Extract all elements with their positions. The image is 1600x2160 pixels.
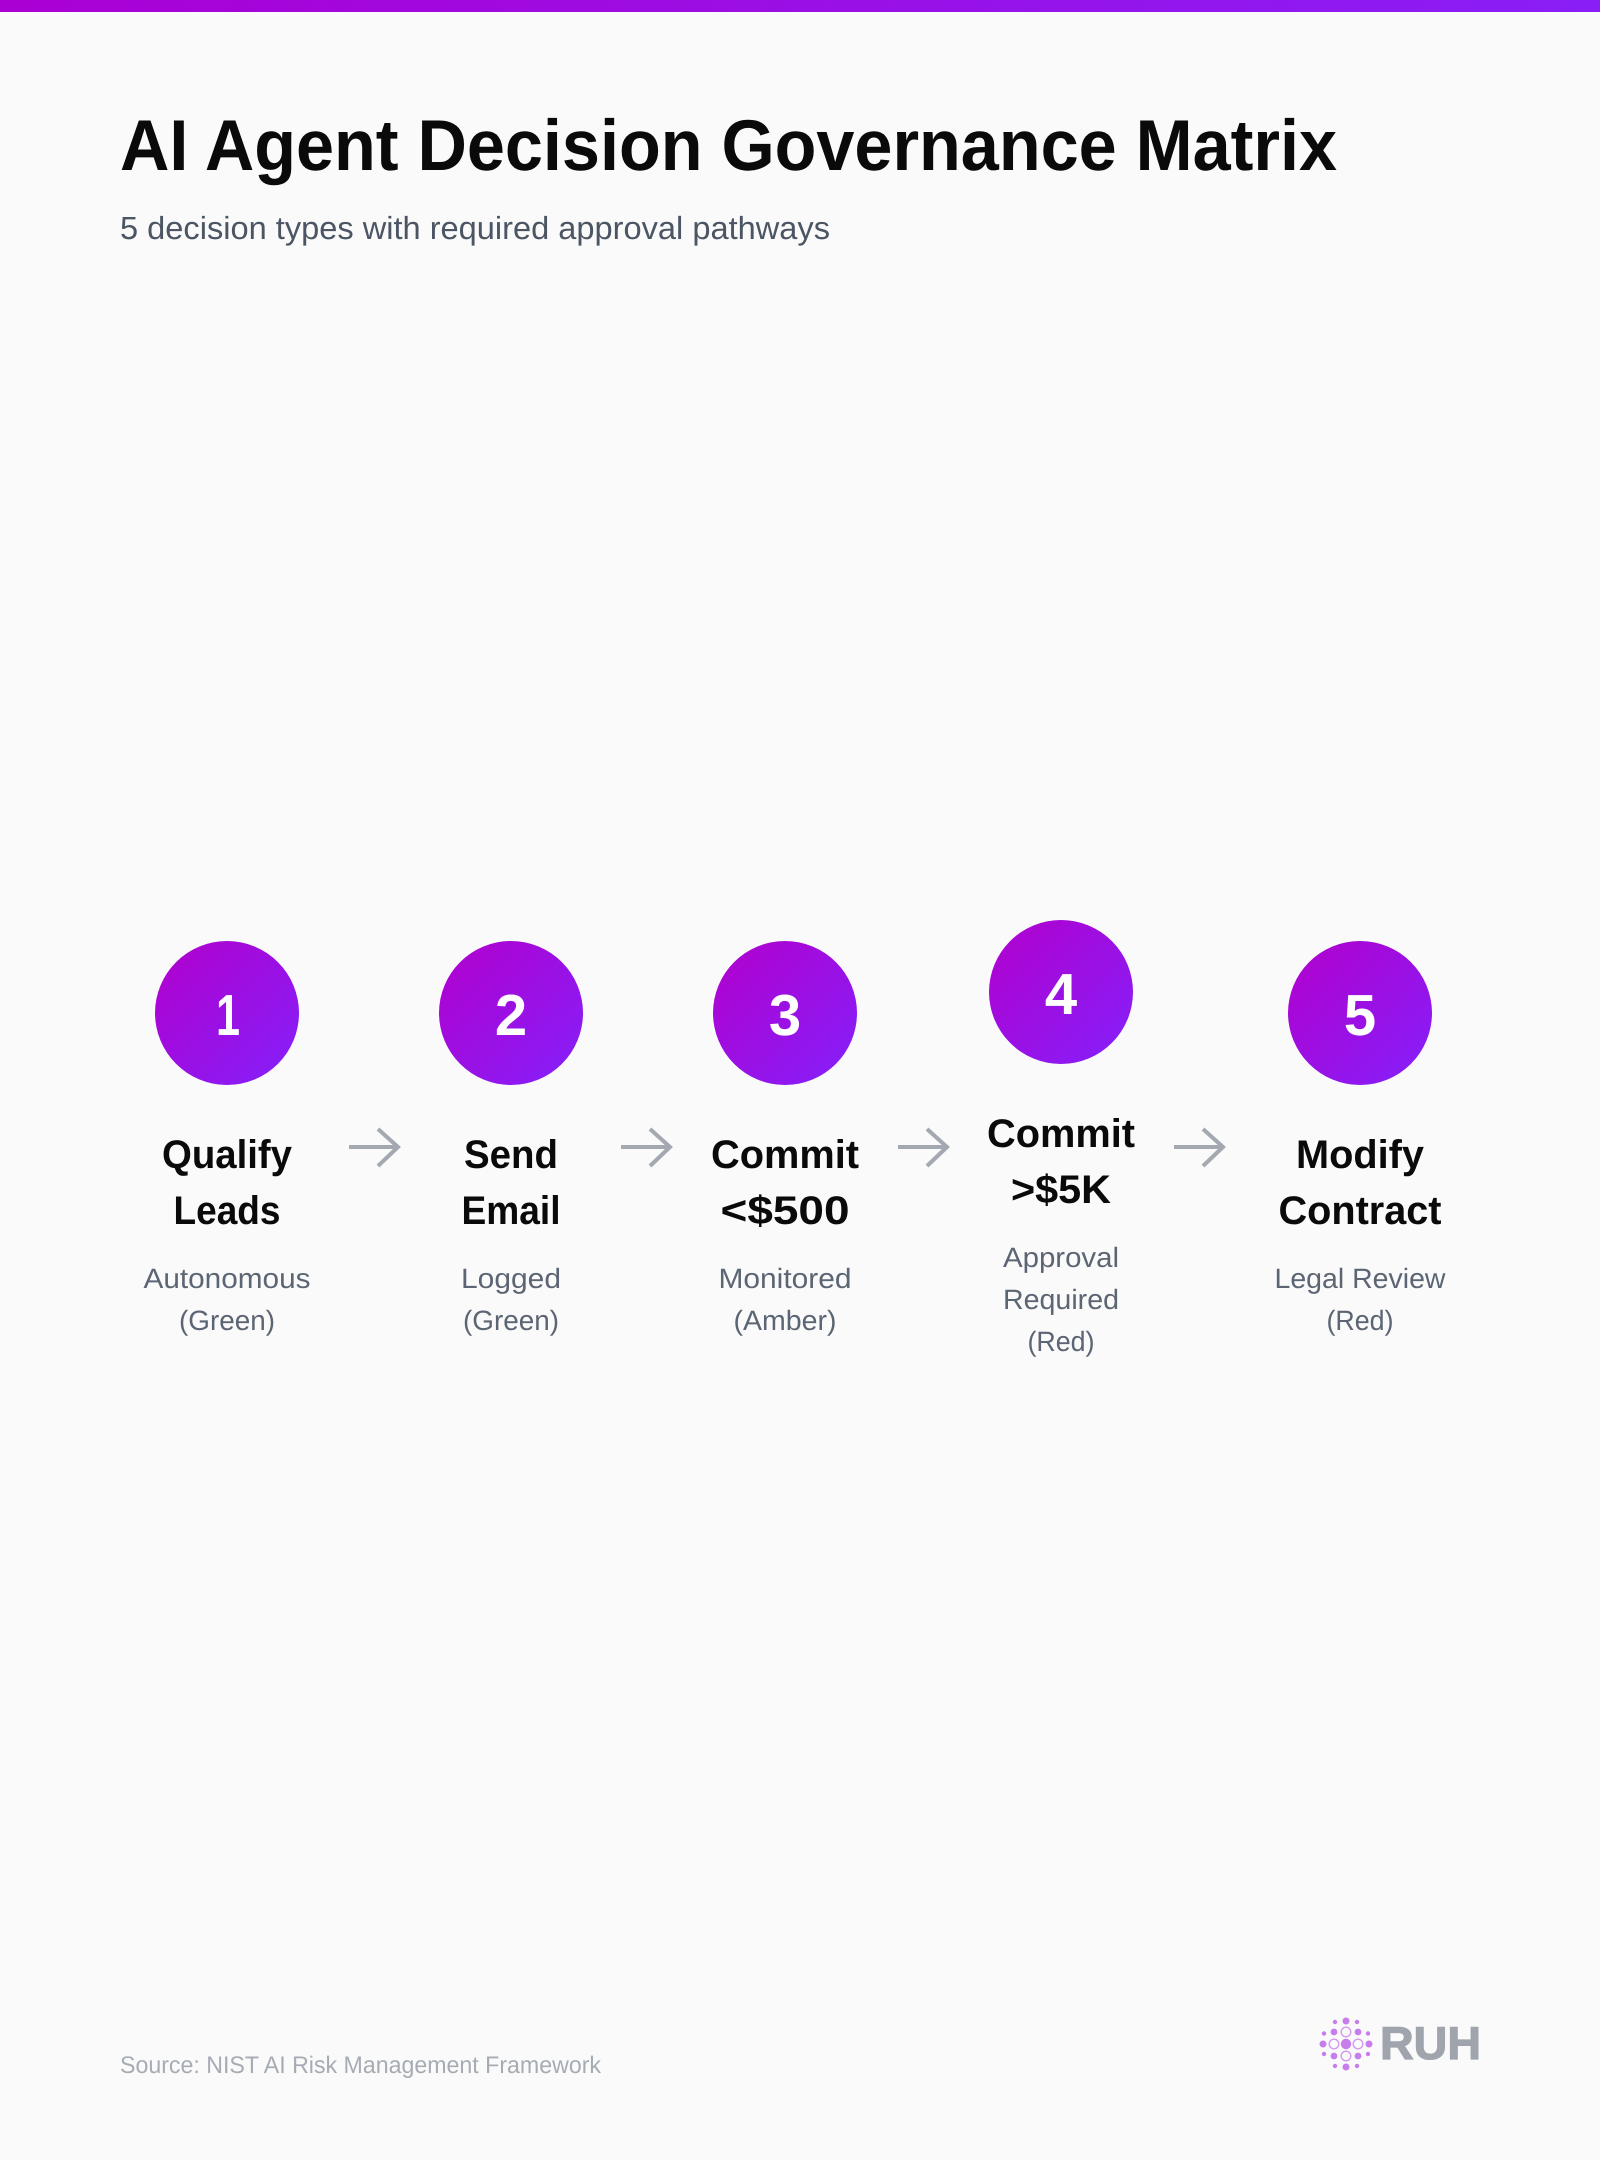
step 2 heading: Email [462,1189,560,1233]
step 1: qualify leads [144,941,310,1336]
title: AI Agent Decision Governance Matrix [120,106,1337,186]
step 4 description [1003,1242,1119,1357]
number badge 4 [989,920,1133,1064]
step 3 heading: Commit [711,1133,859,1177]
arrow 1 to 2 [349,1129,398,1166]
step 2: send email [439,941,583,1336]
step 5 description: Legal Review [1274,1263,1446,1294]
step 1 description [144,1263,310,1336]
step 3 description: Monitored [718,1263,852,1294]
step 5 heading: Contract [1278,1189,1442,1233]
step 4 description: (Red) [1028,1326,1094,1357]
step 1 heading: Qualify [162,1133,293,1177]
number badge 2 [439,941,583,1085]
step 1 heading [162,1133,293,1233]
number badge 5 [1288,941,1432,1085]
arrow 4 to 5 [1174,1129,1223,1166]
logo icon: dot cluster [1320,2018,1372,2070]
logo wordmark: RUH [1380,2017,1481,2069]
number badge 1: 1 [216,983,240,1048]
number badge 3 [713,941,857,1085]
step 4 heading: >$5K [1011,1168,1111,1212]
step 4 heading: Commit [987,1112,1135,1156]
step 4: commit over 5K [987,920,1135,1357]
step 5 heading: Modify [1296,1133,1425,1177]
step 4 description: Required [1003,1284,1119,1315]
arrow 3 to 4 [898,1129,947,1166]
step 3 heading: <$500 [720,1189,850,1233]
subtitle: 5 decision types with required approval pathways [120,210,830,246]
number badge 1 [155,941,299,1085]
step 4 heading [987,1112,1135,1212]
source note: Source: NIST AI Risk Management Framework [120,2052,602,2079]
step 5: modify contract [1274,941,1446,1336]
arrow 2 to 3 [621,1129,670,1166]
step 2 heading: Send [464,1133,558,1177]
step 2 description [461,1263,561,1336]
logo: RUH [1320,2017,1481,2070]
number badge 2: 2 [495,983,527,1048]
step 1 description: Autonomous [144,1263,310,1294]
step 1 heading: Leads [174,1189,280,1233]
step 2 description: Logged [461,1263,561,1294]
step 3 heading [711,1133,859,1233]
step 5 heading [1278,1133,1442,1233]
step 2 heading [462,1133,560,1233]
step 3 description: (Amber) [734,1305,836,1336]
step 5 description [1274,1263,1446,1336]
number badge 3: 3 [769,983,801,1048]
step 4 description: Approval [1003,1242,1119,1273]
step 1 description: (Green) [179,1305,275,1336]
step 2 description: (Green) [463,1305,559,1336]
top accent bar [0,0,1600,12]
step 3: commit under 500 [711,941,859,1336]
step 5 description: (Red) [1326,1305,1394,1336]
number badge 4: 4 [1045,962,1077,1027]
step 3 description [718,1263,852,1336]
number badge 5: 5 [1344,983,1376,1048]
